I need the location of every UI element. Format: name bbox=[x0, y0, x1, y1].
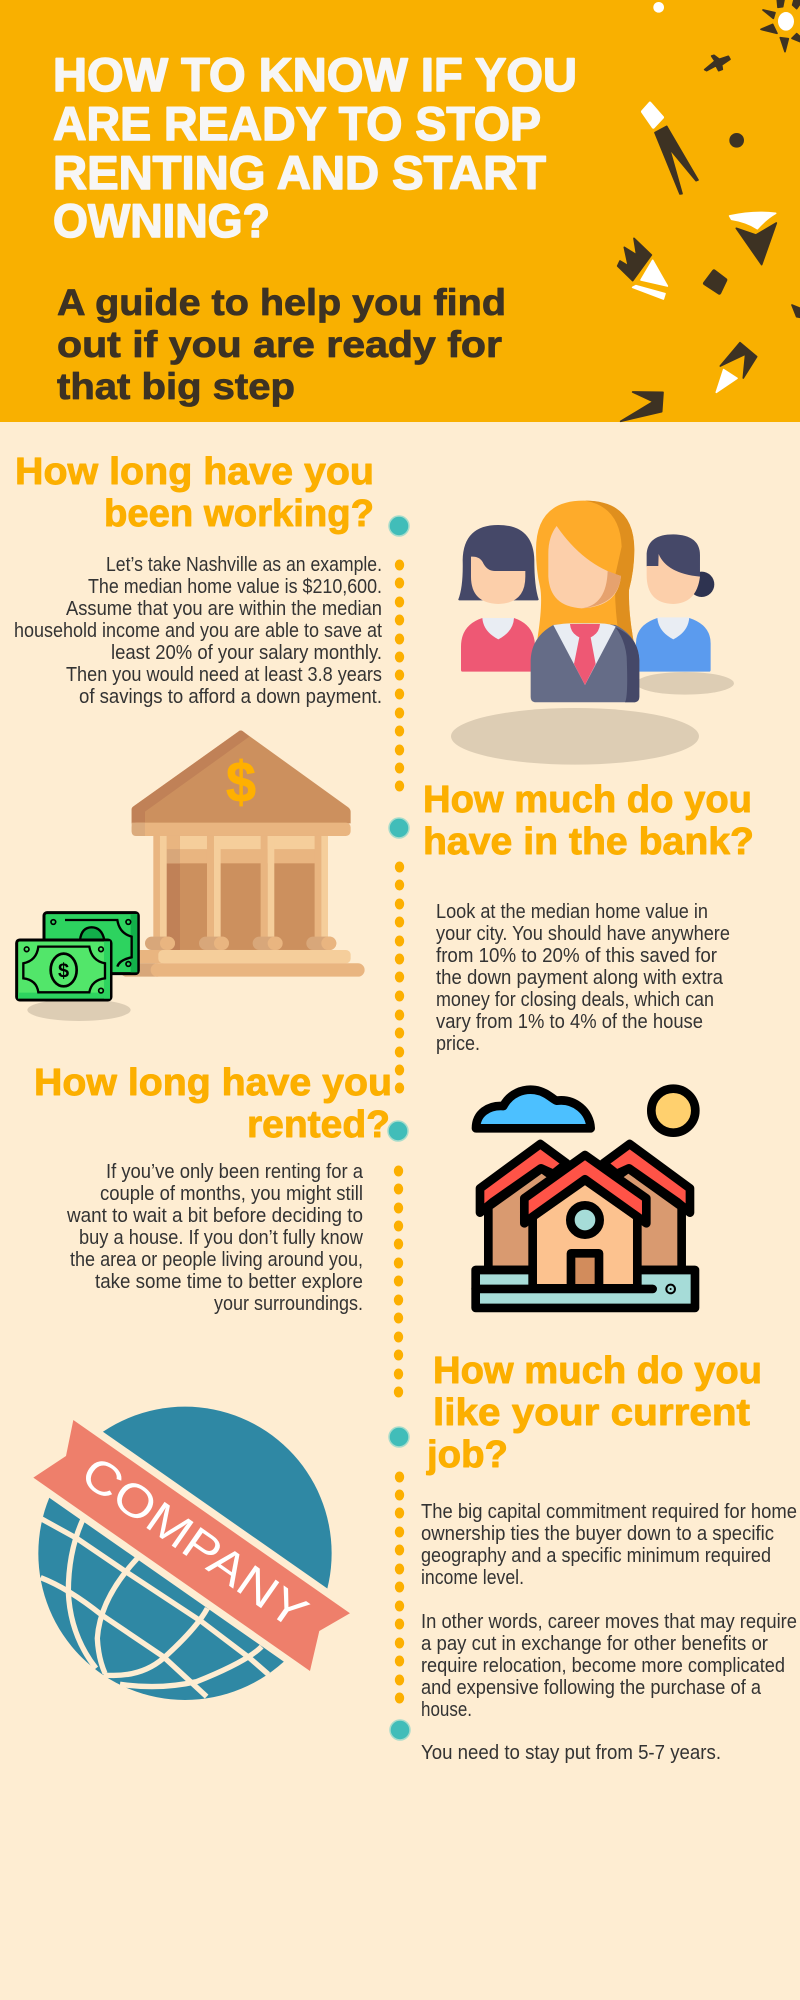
body text bbox=[421, 1501, 797, 1764]
heading: How much do you bbox=[423, 779, 752, 821]
body text: from 10% to 20% of this saved for bbox=[436, 945, 717, 967]
section 4: how much do you like your current job bbox=[421, 1350, 797, 1764]
body text: house. bbox=[421, 1699, 472, 1721]
title bbox=[53, 48, 577, 247]
timeline spine dots bbox=[394, 560, 404, 1704]
body text: take some time to better explore bbox=[95, 1271, 363, 1293]
body text: ownership ties the buyer down to a specific bbox=[421, 1523, 774, 1545]
body text: the area or people living around you, bbox=[70, 1249, 363, 1271]
money: $ bbox=[58, 960, 69, 982]
subtitle: A guide to help you find bbox=[57, 282, 506, 323]
icon: people bbox=[451, 501, 734, 765]
body text: Let’s take Nashville as an example. bbox=[106, 554, 382, 576]
body text: vary from 1% to 4% of the house bbox=[436, 1011, 703, 1033]
heading: job? bbox=[426, 1434, 508, 1476]
subtitle: that big step bbox=[57, 366, 295, 407]
globe grid lines bbox=[41, 1519, 268, 1697]
body text: If you’ve only been renting for a bbox=[106, 1161, 364, 1183]
bank building: $ bbox=[226, 751, 256, 815]
body text: and expensive following the purchase of a bbox=[421, 1677, 762, 1699]
body text: your surroundings. bbox=[214, 1293, 363, 1315]
section 1: how long have you been working bbox=[14, 451, 382, 708]
heading: been working? bbox=[104, 493, 374, 535]
title: ARE READY TO STOP bbox=[53, 97, 541, 150]
body text: your city. You should have anywhere bbox=[436, 923, 730, 945]
title: RENTING AND START bbox=[53, 146, 546, 199]
heading bbox=[426, 1350, 762, 1476]
body text: money for closing deals, which can bbox=[436, 989, 714, 1011]
subtitle: out if you are ready for bbox=[57, 324, 502, 365]
body text: Assume that you are within the median bbox=[66, 598, 382, 620]
heading bbox=[15, 451, 374, 535]
heading bbox=[423, 779, 754, 863]
body text: income level. bbox=[421, 1567, 524, 1589]
timeline teal markers bbox=[388, 516, 410, 1740]
title: HOW TO KNOW IF YOU bbox=[53, 48, 577, 101]
body text: geography and a specific minimum required bbox=[421, 1545, 771, 1567]
heading bbox=[34, 1062, 392, 1146]
body text: Then you would need at least 3.8 years bbox=[66, 664, 382, 686]
section 2: how much do you have in the bank bbox=[423, 779, 754, 1055]
section 3: how long have you rented bbox=[34, 1062, 392, 1315]
body text: price. bbox=[436, 1033, 480, 1055]
heading: like your current bbox=[433, 1392, 750, 1434]
heading: rented? bbox=[247, 1104, 390, 1146]
icon: decorative shapes bottom bbox=[618, 212, 800, 421]
money bbox=[17, 913, 138, 1021]
body text: couple of months, you might still bbox=[100, 1183, 363, 1205]
body text bbox=[66, 1161, 364, 1315]
heading: How long have you bbox=[15, 451, 374, 493]
icon: globe with company banner bbox=[33, 1407, 350, 1700]
body text: a pay cut in exchange for other benefits or bbox=[421, 1633, 768, 1655]
header banner bbox=[0, 0, 800, 422]
body text: buy a house. If you don’t fully know bbox=[79, 1227, 363, 1249]
subtitle bbox=[57, 282, 506, 407]
icon: houses with cloud and sun bbox=[476, 1089, 695, 1308]
body text: The median home value is $210,600. bbox=[88, 576, 382, 598]
body text: of savings to afford a down payment. bbox=[79, 686, 382, 708]
body text: want to wait a bit before deciding to bbox=[66, 1205, 363, 1227]
heading: How much do you bbox=[433, 1350, 762, 1392]
heading: have in the bank? bbox=[423, 821, 754, 863]
body text bbox=[14, 554, 382, 708]
icon: decorative shapes top bbox=[643, 0, 800, 194]
body text: least 20% of your salary monthly. bbox=[111, 642, 382, 664]
body text bbox=[436, 901, 730, 1055]
icon: bank and money bbox=[17, 730, 365, 1021]
bank building bbox=[120, 730, 365, 977]
body text: You need to stay put from 5-7 years. bbox=[421, 1742, 721, 1764]
icon: globe with company banner: COMPANY bbox=[72, 1446, 317, 1639]
body text: household income and you are able to save at bbox=[14, 620, 382, 642]
title: OWNING? bbox=[53, 194, 270, 247]
heading: How long have you bbox=[34, 1062, 392, 1104]
body text: Look at the median home value in bbox=[436, 901, 708, 923]
body text: the down payment along with extra bbox=[436, 967, 724, 989]
